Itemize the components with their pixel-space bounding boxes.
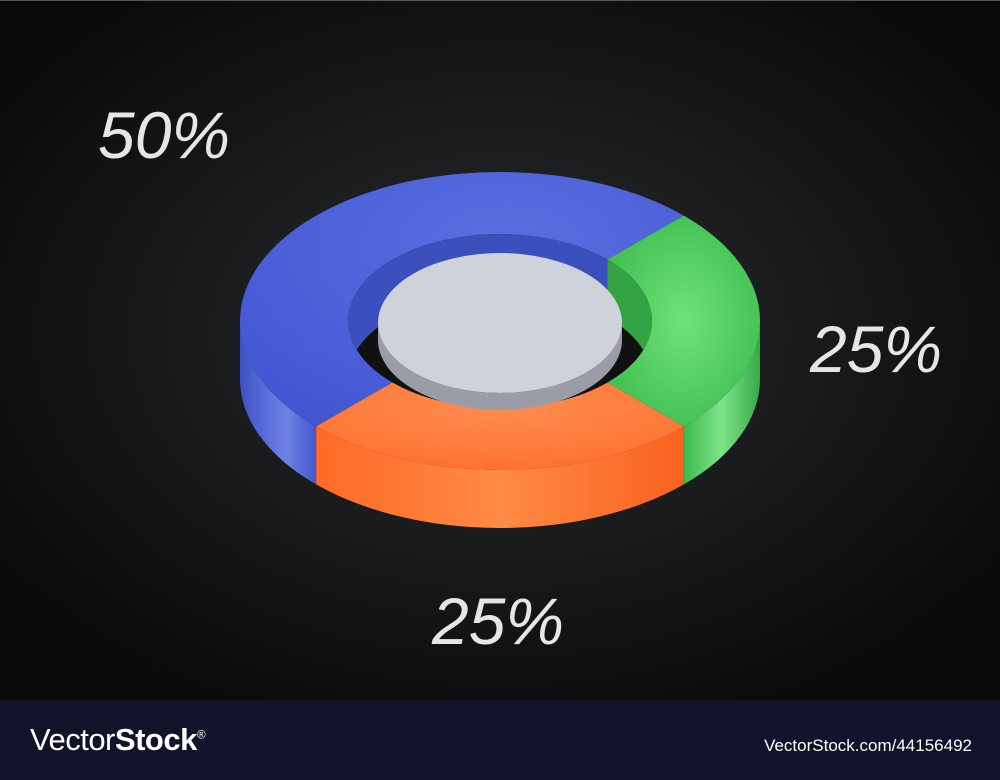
segment sides [240,321,760,528]
footer [0,700,1000,780]
donut chart [240,172,760,528]
label 50%: 50% [98,98,230,172]
footer url: VectorStock.com/44156492 [764,736,972,755]
hole interior [348,234,652,400]
segment: blue 50% [240,172,684,426]
label 25% right: 25% [810,312,942,386]
label 25% bottom: 25% [432,584,564,658]
segment: orange 25% [316,382,684,470]
center disk [378,253,622,410]
footer logo: VectorStock® [30,722,205,757]
segment: green 25% [608,216,760,426]
